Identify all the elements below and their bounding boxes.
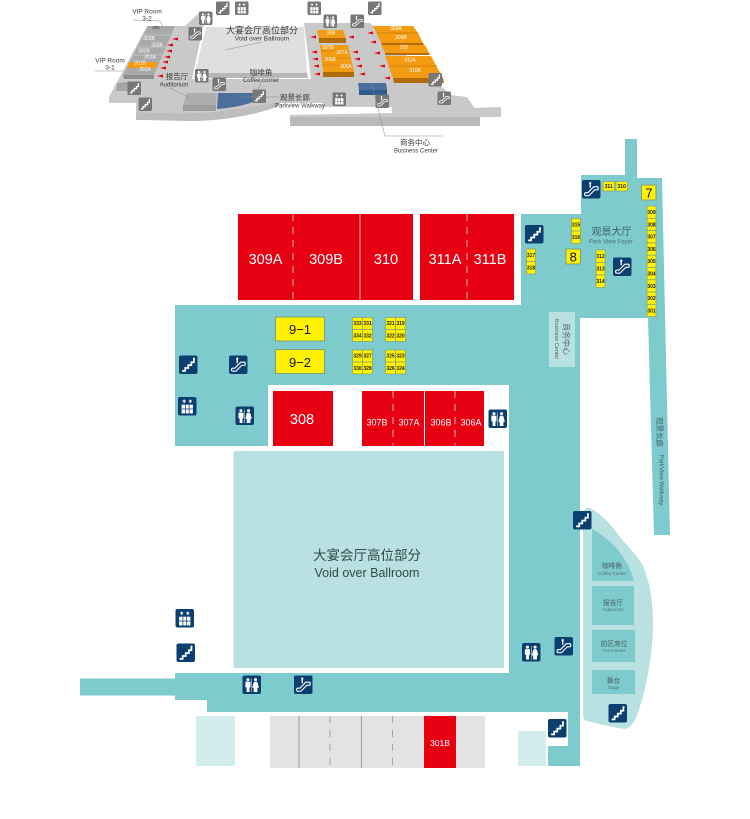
icon: stairs — [608, 704, 627, 722]
yellow zone 9-1: 9−1 — [289, 322, 311, 337]
business center english label: Business Center — [553, 319, 559, 359]
booths 327-330: 327 — [363, 354, 372, 360]
icon: stairs — [548, 719, 566, 738]
icon: escalator — [554, 637, 573, 656]
overview curved walkway edge — [136, 102, 281, 121]
icon: stairs — [179, 356, 198, 374]
overview VIP room numbers: 302B — [138, 48, 150, 54]
booths 331-334 — [352, 318, 372, 342]
red halls 309-311: 310 — [374, 252, 398, 268]
booths 310-311: 310 — [618, 184, 626, 190]
icon: escalator — [613, 258, 632, 276]
red halls 307-306 — [362, 391, 484, 446]
booths 327-330: 330 — [353, 366, 362, 372]
icon: restroom — [488, 410, 507, 428]
overview orange halls right: 311A — [404, 58, 416, 64]
booths 301-309: 309 — [647, 210, 656, 216]
booths 310-311: 311 — [605, 184, 613, 190]
booths 323-326: 323 — [396, 354, 405, 360]
overview labels: 3-1 — [105, 64, 115, 72]
overview labels: Void over Ballroom — [235, 36, 289, 42]
red halls 307-306: 306A — [460, 418, 482, 428]
booths 327-330 — [352, 350, 372, 374]
overview labels: Coffee corner — [243, 78, 279, 84]
booth 8: 8 — [570, 250, 577, 264]
section: front seats: 前区席位 — [601, 639, 628, 648]
booths 319-322: 320 — [396, 334, 405, 340]
main floor teal area — [80, 139, 670, 766]
red halls 307-306: 307B — [366, 418, 388, 428]
yellow zone 9-2: 9−2 — [289, 355, 311, 370]
section: stage — [592, 670, 635, 694]
booths 323-326: 325 — [386, 354, 395, 360]
ballroom english label: Void over Ballroom — [315, 566, 419, 580]
booths 301-309: 304 — [647, 272, 656, 278]
overview VIP rooms — [116, 26, 175, 91]
yellow zone 9-2 — [276, 350, 324, 374]
booths 315-316: 316 — [572, 235, 580, 241]
red halls 307-306: 307A — [398, 418, 420, 428]
booths 301-309: 303 — [647, 284, 656, 290]
overview orange halls centre — [317, 30, 354, 77]
booth 7: 7 — [645, 186, 653, 200]
section: coffee corner: 咖啡角 — [602, 561, 622, 570]
booths 323-326 — [386, 350, 406, 374]
booths 301-309 — [647, 206, 656, 317]
red halls 309-311: 311B — [474, 252, 506, 268]
booths 312-314: 313 — [596, 266, 605, 272]
ballroom title: 大宴会厅高位部分 — [313, 547, 421, 563]
icon: stairs — [525, 225, 544, 244]
section: stage: 舞台 — [607, 676, 620, 685]
booths 317-318: 318 — [527, 266, 535, 272]
overview labels: VIP Room — [132, 8, 162, 16]
walkway label — [655, 417, 665, 505]
foyer title: 观景大厅 — [592, 225, 632, 238]
booths 317-318: 317 — [527, 253, 535, 259]
overview VIP room numbers: 301B — [134, 60, 146, 66]
red halls 307-306: 306B — [430, 418, 452, 428]
section: front seats: Front Seats — [602, 648, 626, 653]
icon: restroom — [242, 676, 261, 694]
overview orange halls centre: 306A — [340, 64, 352, 70]
booths 312-314: 312 — [596, 254, 605, 260]
overview orange halls centre: 308 — [327, 30, 335, 36]
booths 301-309: 301 — [647, 308, 656, 314]
icon: restroom — [236, 406, 254, 425]
overview labels: Business Center — [394, 148, 438, 154]
red halls 309-311: 309A — [249, 252, 283, 268]
booths 323-326: 324 — [396, 366, 405, 372]
section: auditorium: Auditorium — [602, 607, 624, 612]
icon: restroom — [522, 643, 540, 662]
red halls 309-311: 309B — [309, 252, 343, 268]
overview orange halls right — [373, 26, 444, 83]
overview orange halls right: 310 — [400, 45, 408, 51]
booth 7 — [642, 185, 656, 200]
pale room right — [518, 731, 546, 766]
booths 310-311 — [603, 182, 628, 191]
grey exhibition halls — [270, 716, 485, 768]
overview labels: 3-2 — [142, 16, 152, 22]
section: stage: Stage — [608, 685, 620, 690]
booths 319-322 — [386, 318, 406, 342]
booths 312-314: 314 — [596, 279, 605, 285]
booths 331-334: 332 — [363, 334, 372, 340]
booths 301-309: 306 — [647, 247, 656, 253]
icon: lift — [178, 397, 196, 416]
red hall 308: 308 — [290, 412, 314, 428]
section: auditorium: 报告厅 — [603, 598, 623, 607]
overview labels: VIP Room — [95, 58, 125, 64]
booths 301-309: 307 — [647, 235, 656, 241]
section: front seats — [592, 630, 635, 662]
booths 319-322: 319 — [396, 321, 405, 327]
red hall 301B — [424, 716, 456, 768]
overview business center — [358, 83, 387, 95]
booths 301-309: 308 — [647, 222, 656, 228]
section: coffee corner — [592, 529, 634, 581]
overview map — [95, 2, 501, 154]
overview lower walkway edge — [290, 117, 480, 126]
overview labels: Auditorium — [160, 82, 188, 88]
panel: ballroom void — [234, 451, 504, 668]
panel: business center — [549, 312, 575, 367]
overview labels: 观景长廊 — [280, 92, 310, 102]
overview orange halls right: 309B — [395, 35, 407, 41]
red halls 309-311: 311A — [429, 252, 462, 268]
overview coffee corner — [217, 93, 255, 109]
overview orange halls centre: 306B — [324, 57, 336, 63]
booths 315-316: 315 — [572, 222, 580, 228]
overview labels: Parkview Walkway — [275, 104, 325, 110]
icon: stairs — [176, 644, 195, 662]
walkway label: 观景长廊 — [655, 417, 665, 447]
overview labels: 报告厅 — [166, 71, 189, 81]
booths 317-318 — [526, 249, 536, 274]
booths 301-309: 302 — [647, 296, 656, 302]
booths 331-334: 333 — [353, 321, 362, 327]
red halls 309-311 — [238, 214, 514, 300]
booths 323-326: 326 — [386, 366, 395, 372]
booth 8 — [566, 249, 580, 264]
overview orange halls right: 309A — [390, 26, 402, 32]
overview leader lines — [95, 20, 443, 136]
overview VIP room numbers — [134, 36, 163, 73]
overview labels: 咖啡角 — [250, 67, 272, 77]
overview grey icons — [128, 2, 451, 111]
booths 315-316 — [572, 218, 580, 244]
overview VIP room numbers: 302A — [144, 54, 156, 60]
overview ballroom — [194, 27, 308, 78]
booths 319-322: 321 — [386, 321, 395, 327]
booths 331-334: 331 — [363, 321, 372, 327]
walkway label: ParkView Walkway — [658, 455, 664, 505]
panel: auditorium — [583, 508, 653, 729]
overview red arrows — [157, 32, 390, 80]
overview orange halls centre: 307B — [322, 45, 334, 51]
yellow zone 9-1 — [276, 317, 324, 341]
overview labels — [95, 8, 438, 154]
overview VIP room numbers: 303A — [151, 42, 163, 48]
overview labels: 大宴会厅高位部分 — [226, 24, 298, 36]
icon: escalator — [294, 676, 312, 694]
booths 331-334: 334 — [353, 334, 362, 340]
foyer title — [589, 225, 633, 246]
booths 312-314 — [596, 250, 605, 288]
overview VIP room numbers: 301A — [139, 67, 151, 73]
icon: escalator — [582, 180, 600, 198]
booths 327-330: 329 — [353, 354, 362, 360]
booths 301-309: 305 — [647, 259, 656, 265]
overview VIP room numbers: 303B — [143, 36, 155, 42]
icon: lift — [176, 609, 194, 628]
navy wayfinding icons — [176, 180, 632, 738]
overview floor — [109, 13, 501, 126]
overview labels: 商务中心 — [400, 137, 430, 147]
foyer title: Park View Foyer — [589, 240, 633, 246]
overview orange halls centre: 307A — [336, 50, 348, 56]
section: auditorium — [592, 586, 634, 625]
red hall 301B: 301B — [430, 738, 450, 748]
business center chinese label: 商务中心 — [562, 323, 572, 355]
icon: escalator — [229, 356, 248, 374]
booths 327-330: 328 — [363, 366, 372, 372]
overview labels: 305 — [152, 25, 160, 30]
section: coffee corner: Coffee Corner — [598, 571, 627, 576]
icon: stairs — [573, 511, 592, 530]
booths 319-322: 322 — [386, 334, 395, 340]
overview orange halls right: 311B — [409, 68, 421, 74]
pale room left — [196, 716, 235, 766]
overview auditorium box — [183, 93, 217, 111]
red hall 308 — [273, 391, 333, 446]
